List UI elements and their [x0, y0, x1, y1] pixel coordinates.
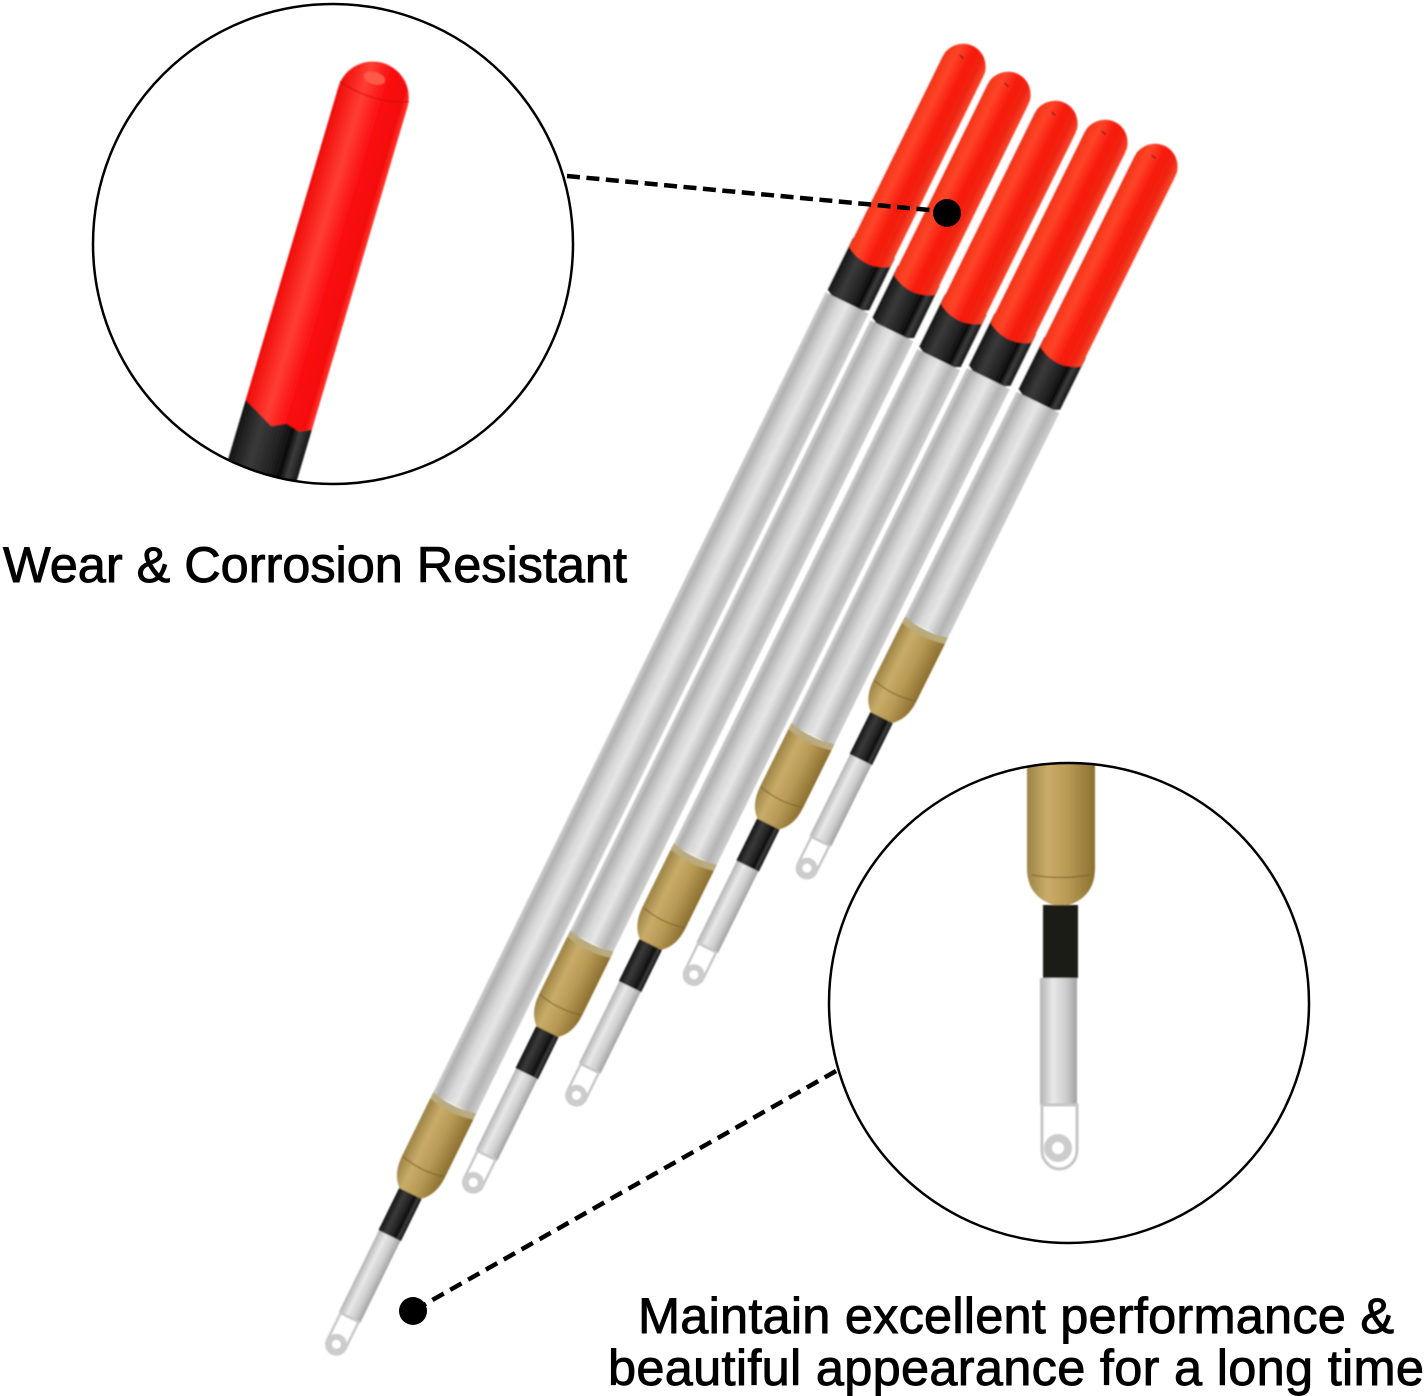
float 5 [779, 134, 1188, 889]
heading: wear and corrosion: Wear & Corrosion Resistant [3, 536, 627, 593]
callout connector: tip [567, 176, 961, 227]
float 3 [549, 92, 1088, 1116]
caption: performance and appearance [608, 1287, 1424, 1396]
callout circle: brass end close-up [829, 760, 1309, 1243]
product: five fishing floats [309, 35, 1188, 1365]
callout connector: brass end [399, 1071, 836, 1325]
caption: performance and appearance: beautiful appearance for a long time [608, 1339, 1424, 1396]
float 4 [666, 110, 1138, 995]
caption: performance and appearance: Maintain excellent performance & [638, 1287, 1394, 1344]
red tip enlarged [227, 60, 410, 480]
brass end enlarged [1027, 760, 1095, 1169]
callout circle: red tip close-up [93, 4, 573, 543]
float 1 [309, 35, 996, 1365]
float 2 [446, 63, 1041, 1203]
